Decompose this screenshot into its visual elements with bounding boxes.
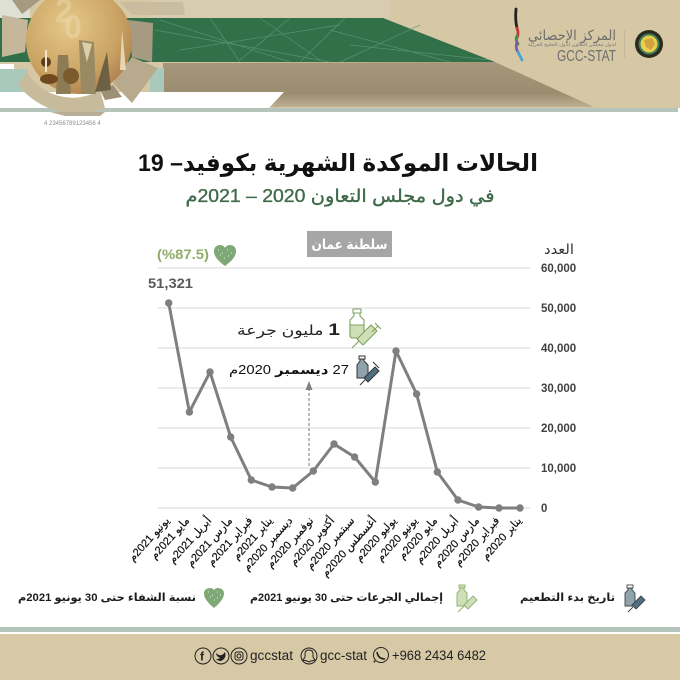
chart: y axis labels: 30,000 — [541, 383, 576, 395]
banner medallion — [2, 0, 185, 127]
medallion: skyline: 0 — [64, 9, 82, 45]
legend: vaccination start date: تاريخ بدء التطعيم — [520, 592, 615, 604]
chart: x axis month labels: فبراير 2020م — [452, 515, 502, 568]
footer: social icons — [195, 648, 388, 664]
icon: dark vaccine — [357, 356, 379, 385]
legend: recovery rate — [18, 588, 224, 608]
subtitle: في دول مجلس التعاون 2020 – 2021م — [185, 186, 494, 207]
chart: y axis labels: 60,000 — [541, 263, 576, 275]
footer: contact text: gccstat — [250, 648, 293, 663]
chart: x axis month labels: مارس 2020م — [432, 515, 482, 569]
medallion: golden globe — [26, 0, 132, 94]
country label: سلطنة عمان — [312, 237, 388, 252]
chart: x axis month labels: أبريل 2021م — [165, 514, 214, 566]
chart: x axis month labels: يوليو 2020م — [353, 515, 399, 564]
banner: white strip — [0, 92, 284, 108]
chart: x axis month labels — [126, 514, 524, 580]
chart: x axis month labels: ديسمبر 2020م — [241, 515, 295, 573]
icon: green vaccine — [350, 309, 381, 348]
chart: line chart — [126, 241, 576, 580]
medallion: number arc: 4 23456789123456 4 — [44, 121, 101, 127]
chart: x axis month labels: سبتمبر 2020م — [304, 515, 357, 572]
chart: y axis labels: العدد — [544, 241, 574, 257]
recovery rate — [157, 245, 236, 266]
chart: x axis month labels: مايو 2021م — [148, 515, 192, 562]
legend: recovery rate: نسبة الشفاء حتى 30 يونيو 2021م — [18, 592, 196, 604]
chart: y axis labels: 50,000 — [541, 303, 576, 315]
callout: total doses — [237, 309, 381, 348]
chart: y axis labels — [541, 241, 576, 515]
logo: wordmark: المركز الإحصائي — [528, 27, 616, 44]
footer: gcc-stat — [320, 648, 367, 663]
chart: x axis month labels: مارس 2021م — [185, 515, 235, 569]
banner: brown band — [0, 62, 594, 107]
logo: emblem — [635, 30, 663, 58]
chart: y axis labels: 0 — [541, 503, 547, 515]
chart: x axis month labels: فبراير 2021م — [205, 515, 255, 568]
callout: total doses: 1 مليون جرعة — [237, 320, 340, 339]
footer: f — [200, 650, 205, 664]
header banner — [0, 0, 680, 112]
legend — [18, 585, 645, 612]
chart: x axis month labels: يناير 2021م — [231, 515, 275, 563]
banner: green band — [0, 18, 495, 62]
chart: data line — [169, 303, 520, 508]
legend: total doses: إجمالي الجرعات حتى 30 يونيو 2021م — [250, 592, 443, 604]
chart: x axis month labels: يونيو 2020م — [374, 515, 420, 564]
logo: لدول مجلس التعاون لدول الخليج العربية — [528, 42, 616, 47]
chart: x axis month labels: أكتوبر 2020م — [286, 514, 337, 568]
chart: y axis labels: 20,000 — [541, 423, 576, 435]
chart: x axis month labels: نوفمبر 2020م — [264, 515, 316, 571]
logo: GCC-STAT — [557, 48, 616, 65]
chart: x axis month labels: أبريل 2020م — [412, 514, 461, 566]
chart: y axis labels: 10,000 — [541, 463, 576, 475]
arrow: vaccination start — [306, 381, 312, 466]
logo — [516, 9, 663, 65]
callout: vaccination start date: 27 ديسمبر 2020م — [229, 363, 349, 377]
chart: x axis month labels: يناير 2020م — [480, 515, 524, 563]
callout: vaccination start date — [229, 356, 379, 385]
medallion: skyline — [40, 0, 126, 94]
footer: +968 2434 6482 — [392, 648, 486, 663]
chart: y axis labels: 40,000 — [541, 343, 576, 355]
footer — [0, 627, 680, 680]
chart: data points — [165, 299, 524, 512]
legend: vaccination start date — [520, 585, 645, 612]
icon: green heart — [214, 245, 236, 266]
peak value: 51,321 — [148, 276, 194, 291]
chart: x axis month labels: مايو 2020م — [396, 515, 440, 562]
chart: x axis month labels: أغسطس 2020م — [318, 514, 379, 580]
country label — [307, 231, 392, 257]
logo: flag streak — [516, 9, 522, 60]
title: الحالات الموكدة الشهرية بكوفيد– 19 — [138, 150, 538, 177]
legend: total doses — [250, 585, 477, 612]
chart: x axis month labels: يونيو 2021م — [126, 515, 172, 564]
recovery rate: (%87.5) — [157, 246, 209, 262]
